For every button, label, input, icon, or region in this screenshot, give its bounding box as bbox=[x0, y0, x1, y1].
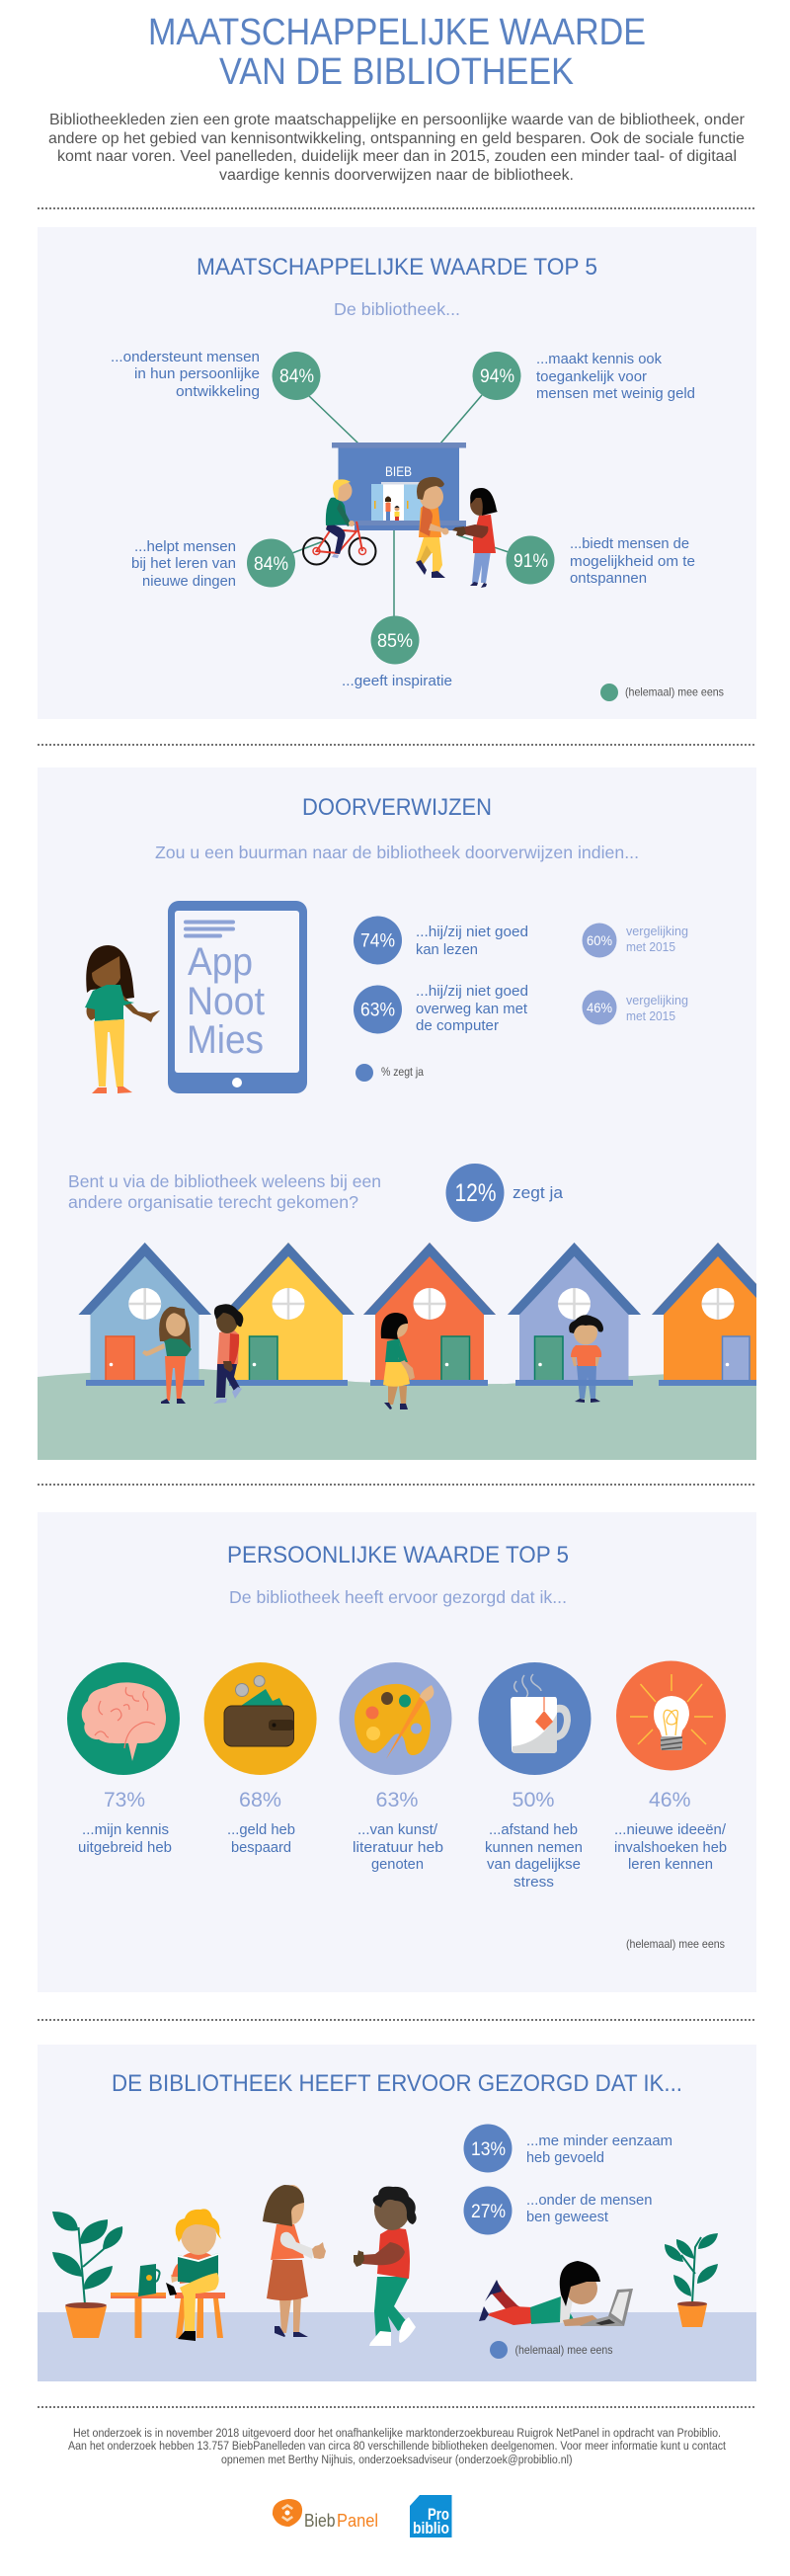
house: red-orange bbox=[363, 1243, 496, 1386]
label: kennis: ...mijn kennis bbox=[82, 1821, 169, 1838]
subheading: Zou u een buurman naar de bibliotheek doorverwijzen indien... bbox=[155, 843, 639, 862]
panel: doorverwijzen bbox=[38, 767, 756, 1460]
logo: Probiblio: Pro bbox=[428, 2505, 449, 2524]
title: MAATSCHAPPELIJKE WAARDE bbox=[148, 12, 646, 53]
ground bbox=[38, 1369, 756, 1460]
stat: 13% eenzaam: heb gevoeld bbox=[526, 2149, 604, 2166]
heading: DOORVERWIJZEN bbox=[302, 794, 492, 821]
illustration: cyclist bbox=[303, 479, 375, 565]
legend bbox=[490, 2341, 612, 2359]
stat: 84% ontwikkeling: ...ondersteunt mensen bbox=[111, 349, 260, 365]
icon: tablet: App bbox=[188, 940, 253, 984]
stat: 63% computer: de computer bbox=[416, 1017, 499, 1034]
comparison: 46% 2015 bbox=[583, 990, 688, 1025]
label: stress: kunnen nemen bbox=[485, 1839, 583, 1856]
heading: MAATSCHAPPELIJKE WAARDE TOP 5 bbox=[197, 254, 597, 281]
illustration: woman in orange dress bbox=[263, 2185, 326, 2337]
comparison: 60% 2015 bbox=[583, 923, 688, 958]
comparison: 60% 2015: vergelijking bbox=[626, 924, 688, 938]
person: man with curly hair bbox=[213, 1304, 243, 1404]
stat: 94% toegankelijk bbox=[472, 351, 695, 402]
illustration: table and reading child bbox=[111, 2209, 225, 2341]
stat: 63% computer bbox=[354, 983, 528, 1034]
label: geld bbox=[227, 1821, 295, 1856]
stat: 74% niet goed lezen bbox=[354, 917, 528, 964]
label: stress bbox=[485, 1821, 583, 1891]
illustration: woman in red bbox=[452, 488, 498, 588]
stat: 91% ontspannen: mogelijkheid om te bbox=[570, 553, 695, 570]
footer text bbox=[68, 2426, 726, 2466]
label: kunst: literatuur heb bbox=[353, 1839, 443, 1856]
logo: Probiblio: biblio bbox=[413, 2519, 449, 2537]
house: yellow bbox=[222, 1243, 355, 1386]
label: ideeen: ...nieuwe ideeën/ bbox=[614, 1821, 727, 1838]
stat: 84% leren: nieuwe dingen bbox=[142, 573, 236, 590]
stat: 63% computer: 63% bbox=[360, 1000, 395, 1021]
percentages: 46% bbox=[649, 1789, 691, 1811]
stat: 91% ontspannen: 91% bbox=[514, 551, 548, 572]
connector lines bbox=[292, 395, 509, 617]
stat: 94% toegankelijk: toegankelijk voor bbox=[536, 368, 647, 385]
illustration: woman with tablet bbox=[85, 945, 160, 1093]
comparison: 60% 2015: met 2015 bbox=[626, 939, 675, 954]
illustration: man in orange bbox=[416, 477, 448, 578]
stat: 74% niet goed lezen: kan lezen bbox=[416, 941, 478, 958]
legend: (helemaal) mee eens bbox=[515, 2343, 612, 2357]
intro text: komt naar voren. Veel panelleden, duidelijk meer dan in 2015, zouden een minder taal- of digitaal bbox=[57, 148, 737, 165]
intro text bbox=[48, 112, 746, 184]
house: blue bbox=[79, 1243, 211, 1386]
title bbox=[148, 12, 646, 93]
heading: DE BIBLIOTHEEK HEEFT ERVOOR GEZORGD DAT IK... bbox=[112, 2070, 682, 2097]
icon: tea mug bbox=[478, 1662, 591, 1775]
stat: 13% eenzaam: 13% bbox=[471, 2139, 506, 2160]
stat: 84% leren bbox=[131, 538, 295, 590]
subheading: De bibliotheek heeft ervoor gezorgd dat ik... bbox=[229, 1587, 567, 1607]
stat: 94% toegankelijk: ...maakt kennis ook bbox=[536, 351, 662, 367]
label: geld: ...geld heb bbox=[227, 1821, 295, 1838]
stat: 84% leren: ...helpt mensen bbox=[134, 538, 236, 555]
stat: 84% leren: bij het leren van bbox=[131, 555, 236, 572]
label: stress: ...afstand heb bbox=[489, 1821, 578, 1838]
stat: 91% ontspannen: ...biedt mensen de bbox=[570, 535, 689, 552]
intro text: Bibliotheekleden zien een grote maatschappelijke en persoonlijke waarde van de bibliotheek, onder bbox=[49, 112, 746, 128]
stat: 94% toegankelijk: 94% bbox=[480, 366, 514, 387]
percentages: 63% bbox=[375, 1789, 419, 1811]
stat: 63% computer: ...hij/zij niet goed bbox=[416, 983, 528, 1000]
stat: 63% computer: overweg kan met bbox=[416, 1001, 528, 1017]
percentages: 68% bbox=[239, 1789, 281, 1811]
icon: paint palette bbox=[340, 1662, 452, 1775]
icon: tablet: Noot bbox=[187, 980, 265, 1023]
intro text: vaardige kennis doorverwijzen naar de bibliotheek. bbox=[219, 167, 574, 184]
stat: 13% eenzaam: ...me minder eenzaam bbox=[526, 2133, 672, 2149]
legend: (helemaal) mee eens bbox=[625, 685, 724, 699]
question: andere organisatie terecht gekomen? bbox=[68, 1192, 358, 1212]
comparison: 46% 2015: met 2015 bbox=[626, 1008, 675, 1023]
label: kennis: uitgebreid heb bbox=[78, 1839, 172, 1856]
panel: maatschappelijke waarde top 5 bbox=[38, 227, 756, 719]
stat: 84% ontwikkeling: 84% bbox=[279, 366, 314, 387]
stat: 84% ontwikkeling: ontwikkeling bbox=[176, 383, 260, 400]
person: boy in orange bbox=[569, 1315, 603, 1403]
house: lavender bbox=[508, 1243, 641, 1386]
plant: left bbox=[52, 2212, 122, 2338]
label: stress: stress bbox=[514, 1874, 554, 1891]
stat: 85% inspiratie bbox=[342, 616, 452, 689]
panel: persoonlijke waarde top 5 bbox=[38, 1512, 756, 1992]
stat: 84% ontwikkeling bbox=[111, 349, 320, 400]
stat: 27% mensen: ben geweest bbox=[526, 2209, 609, 2225]
stat: 85% inspiratie: 85% bbox=[377, 631, 413, 652]
icon: wallet bbox=[204, 1662, 317, 1775]
icon: brain bbox=[67, 1662, 180, 1775]
question bbox=[68, 1171, 381, 1212]
icon: tablet bbox=[168, 901, 307, 1093]
illustration: man in red shirt bbox=[354, 2187, 417, 2346]
stat: 94% toegankelijk: mensen met weinig geld bbox=[536, 385, 695, 402]
stat: 27% mensen: 27% bbox=[471, 2202, 506, 2222]
legend: (helemaal) mee eens bbox=[626, 1937, 725, 1951]
subheading: De bibliotheek... bbox=[334, 299, 460, 319]
icon: library building: BIEB bbox=[385, 463, 412, 479]
label: stress: van dagelijkse bbox=[487, 1856, 581, 1873]
legend bbox=[600, 684, 724, 701]
stat: 74% niet goed lezen: 74% bbox=[360, 930, 395, 952]
stat: 27% mensen: ...onder de mensen bbox=[526, 2192, 652, 2209]
logo: BiebPanel: Bieb bbox=[304, 2511, 336, 2531]
comparison: 46% 2015: 46% bbox=[587, 1000, 612, 1015]
legend: % zegt ja bbox=[381, 1065, 424, 1079]
plant: right bbox=[665, 2233, 718, 2327]
stat: 13% eenzaam bbox=[464, 2124, 672, 2173]
percentages bbox=[104, 1789, 691, 1811]
logo: BiebPanel: Panel bbox=[337, 2511, 378, 2531]
logo: Probiblio bbox=[410, 2495, 452, 2537]
stat: 84% leren: 84% bbox=[254, 554, 288, 575]
label: kunst: ...van kunst/ bbox=[357, 1821, 438, 1838]
house: orange bbox=[652, 1243, 756, 1386]
stat: 84% ontwikkeling: in hun persoonlijke bbox=[134, 365, 260, 382]
icon: library building bbox=[332, 443, 466, 530]
intro text: andere op het gebied van kennisontwikkeling, ontspanning en geld besparen. Ook de sociale functie bbox=[48, 130, 745, 147]
question: Bent u via de bibliotheek weleens bij een bbox=[68, 1171, 381, 1191]
comparison: 46% 2015: vergelijking bbox=[626, 993, 688, 1007]
label: ideeen: invalshoeken heb bbox=[614, 1839, 727, 1856]
stat: 27% mensen bbox=[464, 2187, 652, 2234]
icon: light bulb bbox=[616, 1661, 726, 1770]
percentages: 73% bbox=[104, 1789, 145, 1811]
stat: 12% zegt ja: zegt ja bbox=[513, 1183, 564, 1202]
label: ideeen: leren kennen bbox=[628, 1856, 713, 1873]
title: VAN DE BIBLIOTHEEK bbox=[219, 51, 574, 93]
footer text: opnemen met Berthy Nijhuis, onderzoeksadviseur (onderzoek@probiblio.nl) bbox=[221, 2453, 573, 2466]
label: kunst bbox=[353, 1821, 443, 1873]
logo: BiebPanel bbox=[273, 2499, 378, 2531]
person: woman with green top bbox=[142, 1307, 192, 1404]
label: kennis bbox=[78, 1821, 172, 1856]
label: geld: bespaard bbox=[231, 1839, 291, 1856]
illustration: boy with laptop bbox=[479, 2261, 633, 2326]
panel: de bibliotheek heeft ervoor gezorgd bbox=[38, 2045, 756, 2381]
stat: 91% ontspannen bbox=[506, 535, 695, 587]
stat: 91% ontspannen: ontspannen bbox=[570, 570, 647, 587]
icon: tablet: Mies bbox=[187, 1018, 264, 1062]
stat: 74% niet goed lezen: ...hij/zij niet goed bbox=[416, 924, 528, 940]
stat: 12% zegt ja: 12% bbox=[454, 1179, 496, 1207]
comparison: 60% 2015: 60% bbox=[587, 932, 612, 948]
label: ideeen bbox=[614, 1821, 727, 1873]
percentages: 50% bbox=[512, 1789, 555, 1811]
person: woman in yellow skirt bbox=[381, 1313, 415, 1409]
legend bbox=[356, 1064, 424, 1082]
label: kunst: genoten bbox=[371, 1856, 424, 1873]
stat: 12% zegt ja bbox=[446, 1164, 564, 1222]
heading: PERSOONLIJKE WAARDE TOP 5 bbox=[227, 1542, 569, 1569]
stat: 85% inspiratie: ...geeft inspiratie bbox=[342, 673, 452, 689]
